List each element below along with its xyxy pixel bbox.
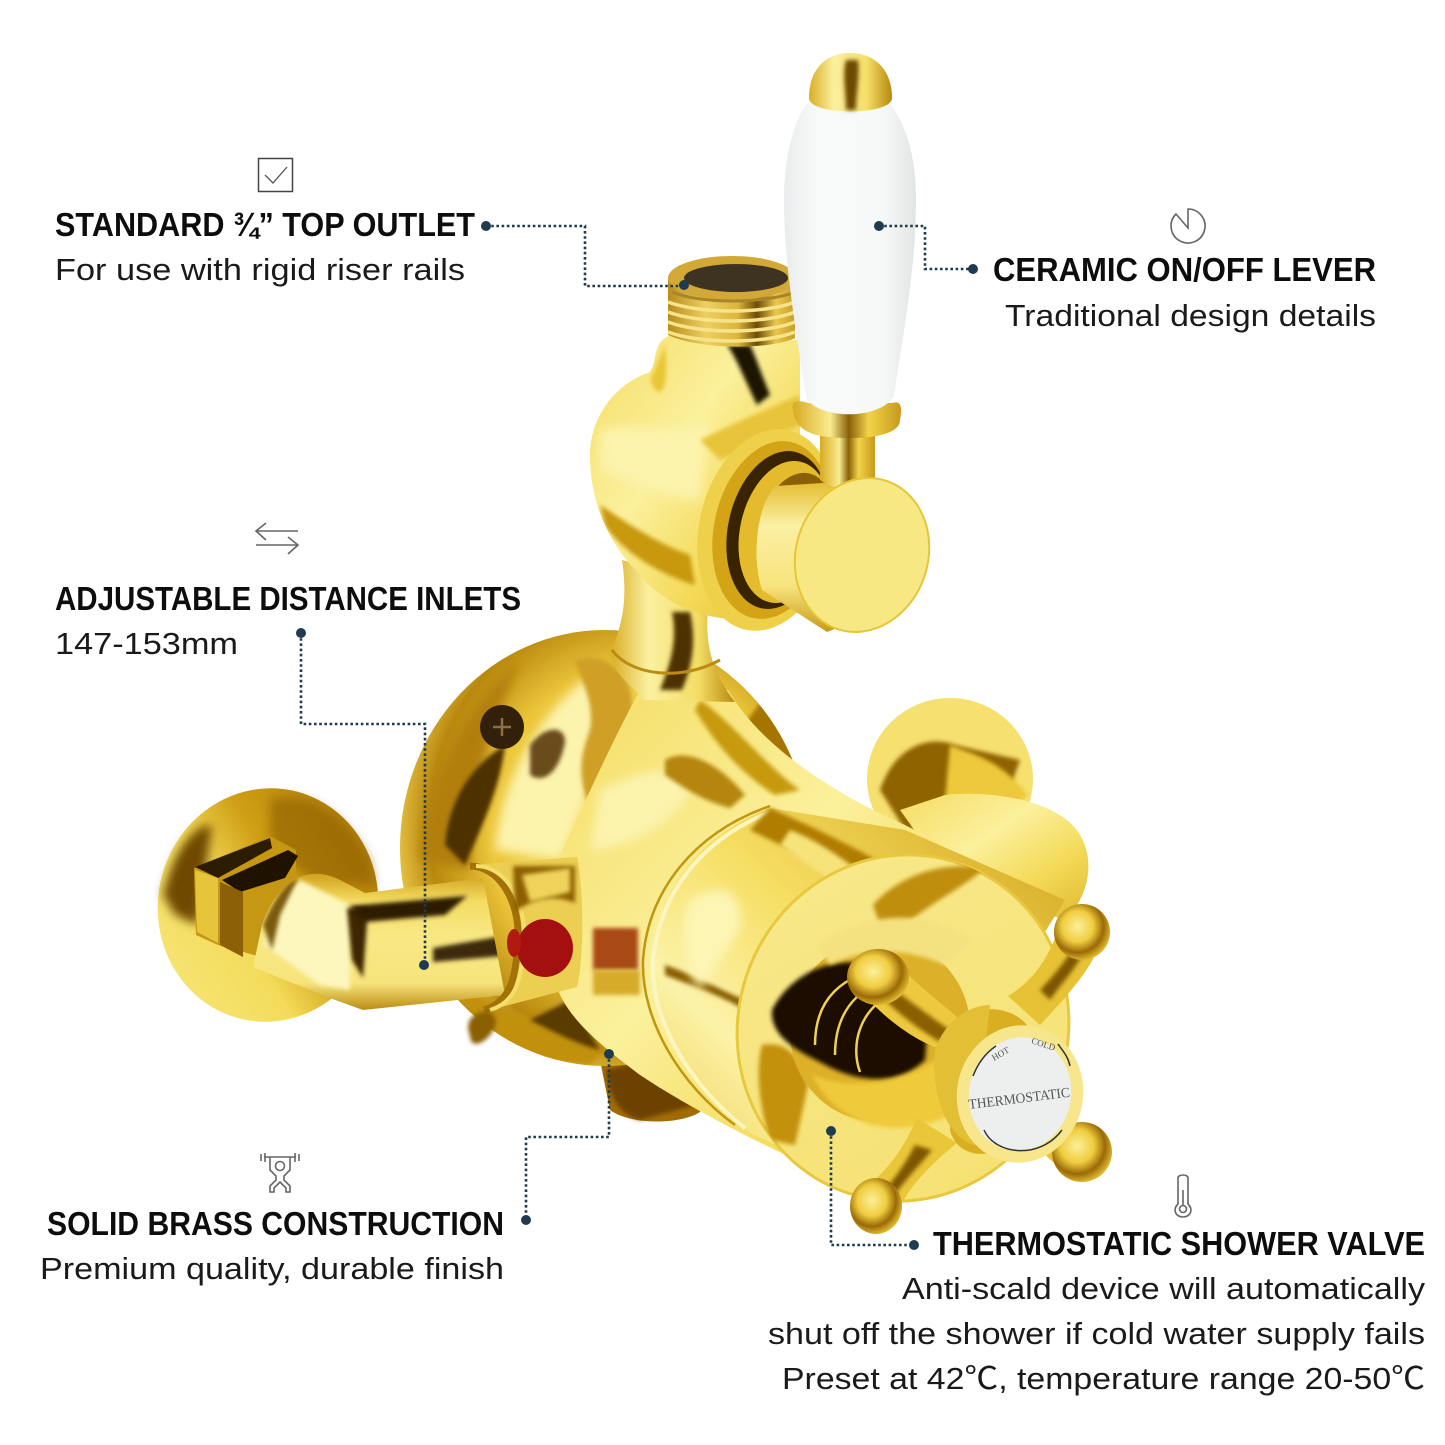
icon: checkbox (258, 158, 292, 192)
text block: adjustable inlets: ADJUSTABLE DISTANCE INLETS (55, 580, 521, 617)
flange screw (480, 705, 524, 749)
text block: thermostatic valve: Anti-scald device will automatically (902, 1271, 1426, 1306)
text block: standard top outlet (55, 206, 475, 287)
cross handle arm top right (1008, 904, 1110, 1025)
connector: adjustable inlets (296, 628, 429, 970)
inlet collar and red hot marker (468, 857, 582, 1044)
text block: thermostatic valve: shut off the shower if cold water supply fails (768, 1316, 1425, 1351)
connector: thermostatic valve (826, 1126, 919, 1250)
lever cylinder end face (775, 460, 949, 650)
text block: adjustable inlets: 147-153mm (55, 626, 238, 661)
text block: thermostatic valve: Preset at 42℃, temperature range 20-50℃ (782, 1361, 1425, 1396)
icon: opposing arrows (256, 523, 298, 554)
valve product illustration (136, 53, 1114, 1244)
text block: standard top outlet: For use with rigid riser rails (55, 252, 465, 287)
lever collar (792, 401, 901, 438)
right wall plate (867, 698, 1033, 860)
text block: solid brass (40, 1205, 504, 1286)
threaded top outlet (668, 256, 796, 347)
text block: solid brass: Premium quality, durable finish (40, 1251, 504, 1286)
right inlet pipe (900, 794, 1088, 920)
thermostatic dial: COLD (1030, 1036, 1057, 1053)
cross handle arm lower left (850, 1118, 957, 1234)
thermostatic dial: THERMOSTATIC (968, 1086, 1071, 1113)
icon: timer dial (1171, 209, 1205, 243)
lever stem (820, 430, 875, 491)
left hex nut (194, 836, 298, 960)
valve barrel (643, 806, 1065, 1195)
main valve body (558, 690, 946, 1154)
thermostatic dial (934, 1005, 1096, 1175)
lever top cap (809, 53, 892, 112)
bottom outlet (600, 1060, 720, 1122)
icon: thermometer (1175, 1175, 1191, 1217)
lever cylinder rings (679, 416, 855, 644)
connector: solid brass (521, 1049, 614, 1225)
thermostatic dial: HOT (990, 1045, 1011, 1063)
lever cylinder (756, 480, 910, 632)
barrel end cap (736, 854, 1070, 1203)
left inlet pipe (253, 874, 505, 1010)
ceramic lever handle (784, 104, 916, 414)
text block: thermostatic valve (768, 1225, 1426, 1396)
neck between flange and upper body (611, 560, 735, 702)
text block: ceramic lever: Traditional design details (1005, 298, 1376, 333)
text block: ceramic lever (993, 251, 1376, 333)
upper mixing body (590, 335, 800, 620)
connector: standard outlet (481, 221, 689, 290)
cross handle arm lower right (1040, 1120, 1112, 1182)
cross handle hub (766, 915, 994, 1145)
text block: ceramic lever: CERAMIC ON/OFF LEVER (993, 251, 1376, 288)
connector: ceramic lever (874, 221, 978, 274)
icon: weightlifter (261, 1153, 299, 1192)
text block: standard top outlet: STANDARD ¾” TOP OUTLET (55, 206, 475, 243)
cross handle arm top left (847, 949, 960, 1052)
left wall plate (136, 768, 400, 1042)
text block: adjustable inlets (55, 580, 521, 661)
wall flange disc (400, 630, 810, 1066)
text block: solid brass: SOLID BRASS CONSTRUCTION (47, 1205, 504, 1242)
